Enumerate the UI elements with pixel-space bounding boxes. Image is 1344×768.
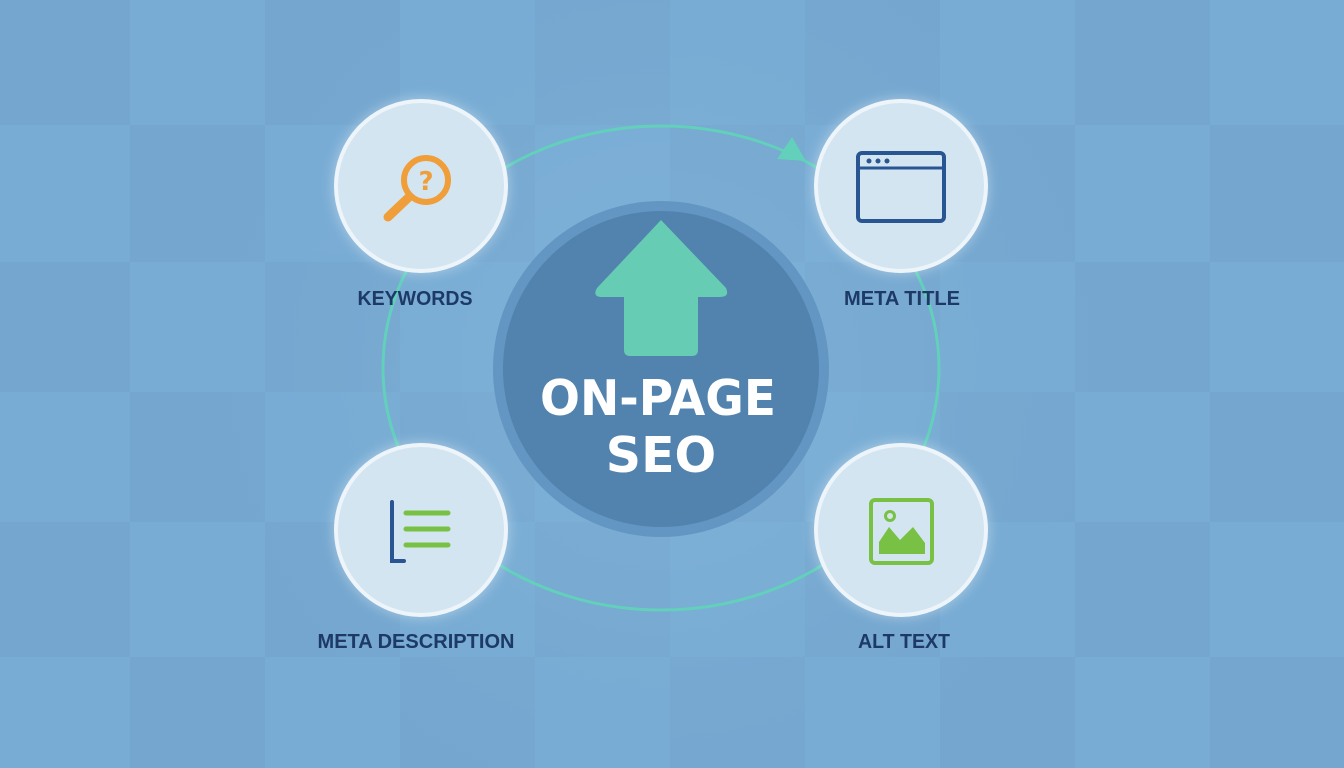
label: meta title: META TITLE bbox=[844, 288, 960, 310]
label: keywords: KEYWORDS bbox=[358, 288, 472, 310]
icon: image bbox=[871, 500, 932, 563]
title: ON-PAGE bbox=[540, 370, 776, 427]
icon: browser window bbox=[858, 153, 944, 221]
orbit ring bbox=[383, 126, 939, 610]
icon: magnifier bbox=[388, 158, 448, 217]
center circle bbox=[493, 201, 829, 537]
icon: text lines bbox=[392, 502, 448, 561]
label: alt text: ALT TEXT bbox=[858, 631, 950, 653]
icon: up arrow bbox=[595, 220, 727, 356]
center circle: SEO bbox=[606, 427, 716, 484]
orbit arrowhead bbox=[777, 137, 806, 161]
node: meta description bbox=[318, 442, 514, 653]
node: alt text bbox=[813, 442, 989, 653]
label: meta description: META DESCRIPTION bbox=[318, 631, 514, 653]
node: meta title bbox=[813, 98, 989, 310]
icon: magnifier: ? bbox=[418, 167, 434, 197]
node: keywords bbox=[333, 98, 509, 310]
